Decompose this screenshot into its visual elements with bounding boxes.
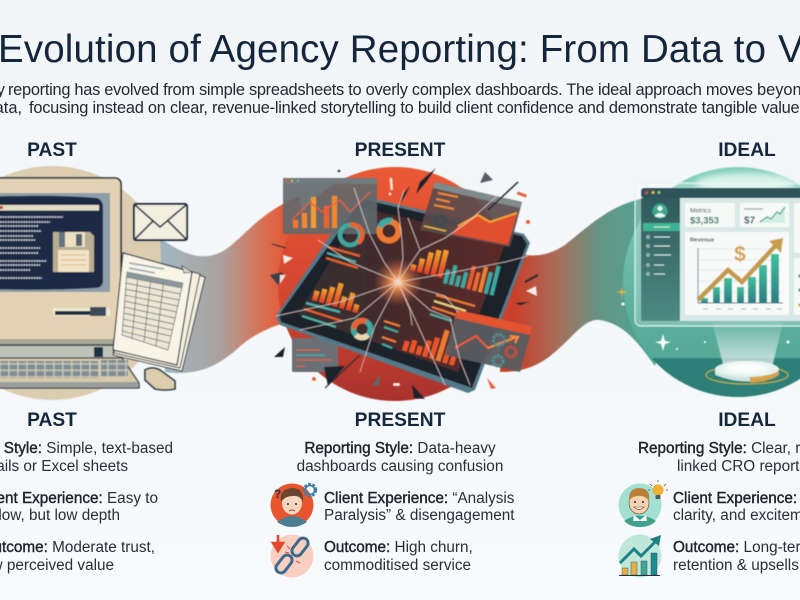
heading: present: PRESENT	[355, 140, 446, 161]
icon: envelope	[134, 204, 187, 240]
bar chart: left	[312, 277, 364, 313]
heading: ideal: IDEAL	[718, 140, 776, 161]
text: ideal client experience: Client Experience:	[673, 490, 797, 507]
donut chart: bottom	[354, 320, 370, 338]
icon: retro computer	[0, 178, 121, 358]
bar chart: bottom	[402, 319, 463, 366]
icon: happy client with idea	[618, 480, 668, 527]
icon: mouse	[145, 368, 175, 390]
panel: present text	[270, 410, 515, 578]
icon: growth chart	[618, 534, 662, 578]
panel: ideal text	[618, 410, 800, 578]
text: present outcome second line: commoditised service	[324, 557, 471, 574]
chart: revenue: Revenue	[690, 238, 715, 244]
text: present reporting style: Reporting Style: Data-heavy	[304, 440, 496, 457]
sparkles	[616, 286, 790, 351]
heading: past: PAST	[27, 140, 77, 161]
icon: spreadsheet stack	[113, 253, 205, 371]
card: sparkline: $7	[744, 216, 756, 226]
chart: revenue: $	[734, 243, 746, 266]
panel: glass frame	[635, 183, 800, 326]
panel: dashboard window	[641, 188, 800, 321]
illustration: ideal dashboard hologram	[616, 183, 800, 384]
text: present outcome: Outcome: High churn,	[324, 539, 473, 556]
text: present client experience second line: Paralysis” & disengagement	[324, 507, 515, 524]
heading: ideal label: IDEAL	[718, 410, 776, 431]
debris shards	[270, 168, 538, 399]
text: present reporting style second line: dashboards causing confusion	[297, 458, 503, 475]
intro text: reporting has evolved from simple spreadsheets to overly complex dashboards. The ideal approach moves	[8, 81, 753, 99]
text: ideal outcome second line: retention & upsells	[673, 557, 799, 574]
card: metrics: Metrics	[690, 208, 712, 214]
list bars	[302, 247, 475, 348]
donut chart: centre	[380, 221, 398, 240]
panel: bottom right window with gears	[445, 310, 532, 372]
heading: past label: PAST	[27, 410, 77, 431]
light beam	[712, 322, 783, 368]
title: Evolution of Agency Reporting: From Data to	[0, 28, 766, 71]
card: metrics: $3,353	[690, 216, 719, 226]
icon: keyboard	[0, 358, 139, 388]
icon: confused client	[270, 484, 316, 527]
crack flash	[374, 258, 422, 306]
glass cracks	[276, 188, 528, 385]
card: metrics	[685, 203, 735, 227]
intro text: focusing instead on clear, revenue-linked storytelling to build client confidence and demonstrate tangible value.	[29, 99, 800, 117]
bar chart: centre right	[410, 243, 449, 278]
card: right top	[794, 203, 800, 253]
panel: top left chart window	[283, 178, 377, 234]
panel: top right area chart window	[420, 182, 522, 247]
icon: floppy disk	[53, 232, 94, 272]
icon: broken chain	[270, 534, 314, 578]
card: right bottom	[794, 258, 800, 315]
illustration: present cracked tablet	[270, 168, 538, 399]
intro text	[0, 81, 800, 117]
card: sparkline	[740, 203, 789, 227]
icon: confused client: ?	[274, 487, 281, 501]
chart: revenue	[685, 232, 789, 315]
icon: hologram platform	[706, 361, 788, 384]
sidebar	[641, 198, 680, 321]
bar chart: teal and orange	[443, 254, 501, 296]
donut chart: left	[340, 225, 362, 245]
heading: present label: PRESENT	[355, 410, 446, 431]
icon: tablet	[276, 196, 530, 393]
background flow ribbons	[0, 166, 800, 403]
panel: bottom left window	[292, 338, 338, 372]
panel: past text	[0, 410, 173, 574]
illustration: past computer and documents	[0, 178, 205, 390]
text: present client experience: Client Experience: “Analysis	[324, 490, 515, 507]
